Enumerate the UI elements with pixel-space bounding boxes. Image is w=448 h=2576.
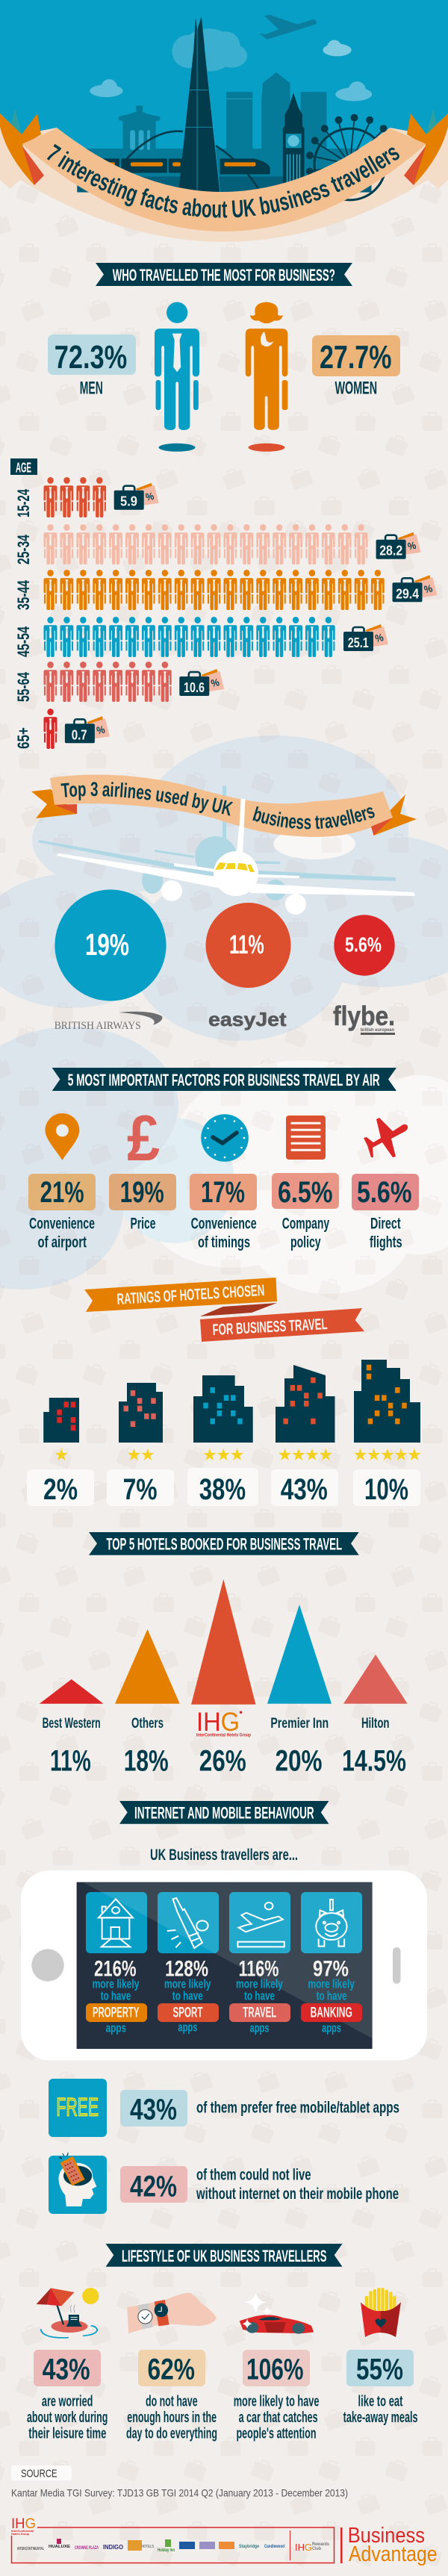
factor: timings bbox=[190, 1114, 257, 1251]
factor: company policy: Company bbox=[282, 1216, 329, 1233]
lifestyle: hours in day: enough hours in the bbox=[127, 2409, 217, 2426]
footer logos: INTERCONTINENTAL bbox=[17, 2547, 44, 2551]
1 star hotel: 2% bbox=[43, 1473, 78, 1506]
factor: company policy: policy bbox=[290, 1234, 321, 1251]
British Airways: 19% bbox=[85, 927, 129, 962]
Others bbox=[115, 1629, 180, 1778]
stat: free apps bbox=[49, 2079, 399, 2137]
app: property bbox=[86, 1957, 147, 2035]
subheading: UK Business travellers are... bbox=[150, 1847, 298, 1864]
heading ribbon: top 3 airlines: business travellers bbox=[252, 806, 375, 829]
footer logos: Holiday Inn bbox=[158, 2548, 175, 2553]
app: property: apps bbox=[106, 2021, 126, 2035]
app: travel: apps bbox=[249, 2021, 269, 2035]
app: banking: apps bbox=[322, 2021, 341, 2035]
illustration: aeroplane bbox=[38, 785, 415, 915]
factor: price: Price bbox=[130, 1216, 155, 1233]
age 25-34: 28.2 bbox=[379, 543, 402, 559]
shadow: man bbox=[158, 444, 196, 452]
icon: head with phone bbox=[58, 2152, 96, 2206]
footer logos: Candlewood bbox=[264, 2545, 284, 2549]
heading: lifestyle bbox=[106, 2244, 342, 2267]
4 star hotel: 43% bbox=[281, 1473, 328, 1506]
age 35-44 bbox=[14, 570, 438, 610]
lifestyle: hours in day: 62% bbox=[148, 2353, 195, 2386]
lifestyle: take-away bbox=[343, 2288, 418, 2426]
skyline bbox=[77, 15, 388, 200]
ribbon tails bbox=[0, 109, 448, 185]
icon: man bbox=[155, 302, 199, 430]
Hilton: Hilton bbox=[361, 1716, 390, 1732]
hotel ratings bbox=[27, 1360, 421, 1506]
age 55-64: % bbox=[210, 676, 221, 689]
IHG bbox=[191, 1579, 255, 1778]
app: property: more likely bbox=[93, 1977, 140, 1991]
factor: airport: 21% bbox=[40, 1176, 84, 1209]
lifestyle: car: people's attention bbox=[236, 2426, 317, 2442]
app: sport: SPORT bbox=[173, 2006, 203, 2021]
factors row bbox=[28, 1103, 419, 1251]
factor: airport: of airport bbox=[37, 1234, 87, 1251]
5 star hotel bbox=[353, 1360, 421, 1506]
lifestyle: hours in day: do not have bbox=[146, 2393, 198, 2409]
app: sport: more likely bbox=[164, 1977, 211, 1991]
source bbox=[11, 2465, 348, 2498]
Others: 18% bbox=[124, 1745, 169, 1778]
source: Kantar Media TGI Survey: TJD13 GB TGI 2014 Q2 (January 2013 - December 2013) bbox=[11, 2486, 348, 2498]
age 25-34 bbox=[14, 524, 421, 564]
IHG: InterContinental Hotels Group bbox=[196, 1734, 251, 1738]
app: sport: apps bbox=[178, 2020, 197, 2035]
flybe: british european bbox=[361, 1028, 394, 1033]
age 45-54: 25.1 bbox=[348, 635, 369, 650]
easyJet bbox=[206, 903, 291, 1030]
lifestyle: worried about work: are worried bbox=[42, 2393, 93, 2409]
app: travel: to have bbox=[244, 1989, 275, 2003]
stat: internet on mobile: 42% bbox=[130, 2170, 177, 2203]
3 star hotel bbox=[187, 1375, 258, 1506]
age 65+: 65+ bbox=[14, 727, 33, 749]
title ribbon bbox=[22, 128, 426, 231]
heading ribbons: ratings of hotels bbox=[84, 1278, 364, 1342]
age 45-54 bbox=[14, 617, 388, 657]
factor: timings: of timings bbox=[198, 1234, 250, 1251]
flybe: flybe. bbox=[333, 1001, 395, 1031]
stat: free apps: 43% bbox=[130, 2093, 177, 2126]
lifestyle: hours in day bbox=[126, 2293, 217, 2442]
lifestyle: take-away: like to eat bbox=[358, 2393, 403, 2409]
age 15-24 bbox=[14, 477, 159, 517]
lifestyle row bbox=[27, 2288, 418, 2442]
icon: woman bbox=[246, 302, 287, 430]
age 15-24: % bbox=[144, 490, 155, 503]
Others: Others bbox=[131, 1716, 164, 1732]
age heading bbox=[10, 458, 37, 475]
factor: airport bbox=[28, 1113, 96, 1251]
app: banking: 97% bbox=[313, 1957, 349, 1982]
age 15-24: 15-24 bbox=[14, 488, 33, 517]
lifestyle: car: more likely to have bbox=[234, 2393, 320, 2409]
5 star hotel: 10% bbox=[364, 1473, 408, 1506]
Best Western: 11% bbox=[50, 1745, 91, 1778]
age heading: AGE bbox=[16, 460, 31, 475]
app: sport: to have bbox=[172, 1989, 203, 2003]
lifestyle: worried about work: about work during bbox=[27, 2409, 108, 2426]
footer logos: InterContinental bbox=[11, 2529, 34, 2533]
Hilton bbox=[342, 1655, 408, 1778]
British Airways bbox=[55, 889, 167, 1032]
app tiles bbox=[86, 1892, 362, 1953]
header illustration bbox=[0, 0, 448, 242]
factor: timings: 17% bbox=[201, 1176, 245, 1209]
1 star hotel bbox=[27, 1398, 94, 1506]
Business Advantage logo bbox=[340, 2524, 438, 2566]
age 65+: % bbox=[96, 723, 106, 736]
factor: company policy: 6.5% bbox=[278, 1176, 333, 1209]
footer logos: IHG bbox=[295, 2542, 312, 2553]
IHG: IHG bbox=[196, 1708, 240, 1737]
app: property: 216% bbox=[94, 1957, 137, 1982]
top hotels chart bbox=[40, 1579, 408, 1778]
Premier Inn: Premier Inn bbox=[270, 1716, 329, 1732]
lifestyle: car bbox=[234, 2292, 320, 2442]
factor: direct flights: Direct bbox=[370, 1216, 401, 1233]
women stat bbox=[312, 335, 400, 398]
app icons bbox=[99, 1898, 347, 1948]
factor: price: 19% bbox=[120, 1176, 164, 1209]
heading: 5 factors bbox=[52, 1068, 396, 1091]
heading ribbons: ratings of hotels: FOR BUSINESS TRAVEL bbox=[212, 1316, 328, 1339]
app: banking: BANKING bbox=[311, 2006, 352, 2021]
airlines bubbles bbox=[55, 889, 395, 1035]
men stat: 72.3% bbox=[55, 339, 127, 376]
footer logos: INDIGO bbox=[103, 2544, 123, 2551]
heading: internet and mobile: INTERNET AND MOBILE BEHAVIOUR bbox=[134, 1803, 314, 1822]
men stat bbox=[48, 335, 136, 398]
footer logos: Staybridge bbox=[239, 2545, 260, 2549]
lifestyle: worried about work: their leisure time bbox=[28, 2426, 106, 2442]
app: travel: TRAVEL bbox=[243, 2006, 277, 2021]
heading: internet and mobile bbox=[119, 1801, 329, 1824]
heading ribbon: top 3 airlines bbox=[31, 775, 417, 837]
IHG: 26% bbox=[199, 1745, 246, 1778]
heading ribbons: ratings of hotels: RATINGS OF HOTELS CHOSEN bbox=[116, 1282, 265, 1308]
footer logos: HUALUXE bbox=[49, 2545, 71, 2549]
age 45-54: 45-54 bbox=[14, 626, 33, 657]
app: travel bbox=[229, 1957, 290, 2035]
factor: direct flights: 5.6% bbox=[357, 1176, 412, 1209]
factor: company policy bbox=[272, 1116, 339, 1251]
age 15-24: 5.9 bbox=[120, 494, 137, 509]
app: travel: 116% bbox=[239, 1957, 279, 1982]
age 25-34: 25-34 bbox=[14, 534, 33, 564]
lifestyle: worried about work bbox=[27, 2288, 108, 2442]
age 55-64: 10.6 bbox=[184, 679, 205, 695]
title: 7 interesting facts about UK business travellers bbox=[46, 143, 399, 218]
lifestyle: take-away: 55% bbox=[356, 2353, 403, 2386]
lifestyle: car: a car that catches bbox=[239, 2409, 318, 2426]
factor: price bbox=[109, 1103, 176, 1233]
stat: internet on mobile: of them could not live bbox=[196, 2166, 311, 2183]
heading: top 5 hotels bbox=[89, 1532, 359, 1555]
lifestyle: hours in day: day to do everything bbox=[126, 2426, 217, 2442]
easyJet: 11% bbox=[229, 930, 264, 959]
flybe: 5.6% bbox=[345, 933, 382, 956]
factor: airport: Convenience bbox=[29, 1216, 95, 1233]
app: banking bbox=[301, 1957, 362, 2035]
factor: direct flights: flights bbox=[370, 1234, 402, 1251]
British Airways: BRITISH AIRWAYS bbox=[55, 1020, 141, 1032]
lifestyle: car: 106% bbox=[246, 2353, 303, 2386]
age 35-44: % bbox=[423, 582, 434, 595]
flybe bbox=[333, 915, 395, 1035]
phone panel bbox=[21, 1870, 427, 2060]
stat: free apps: FREE bbox=[56, 2093, 99, 2121]
4 star hotel bbox=[271, 1365, 338, 1506]
Premier Inn bbox=[267, 1605, 332, 1778]
women stat: 27.7% bbox=[320, 339, 391, 376]
2 star hotel: 7% bbox=[123, 1473, 158, 1506]
men stat: MEN bbox=[80, 378, 103, 398]
age 65+ bbox=[14, 709, 110, 749]
stat: internet on mobile bbox=[49, 2152, 399, 2214]
Hilton: 14.5% bbox=[342, 1745, 406, 1778]
easyJet: easyJet bbox=[208, 1008, 287, 1030]
age chart bbox=[10, 458, 438, 749]
age 55-64: 55-64 bbox=[14, 671, 33, 702]
heading ribbon: top 3 airlines: Top 3 airlines used by UK bbox=[60, 782, 233, 816]
app: sport bbox=[158, 1957, 219, 2035]
age 35-44: 35-44 bbox=[14, 579, 33, 610]
factor: timings: Convenience bbox=[191, 1216, 257, 1233]
app: travel: more likely bbox=[236, 1977, 283, 1991]
app: property: to have bbox=[101, 1989, 131, 2003]
age 25-34: % bbox=[406, 539, 417, 553]
footer logos: CROWNE PLAZA bbox=[75, 2546, 99, 2551]
factor: price: £ bbox=[127, 1103, 160, 1175]
app: property: PROPERTY bbox=[93, 2006, 140, 2021]
age 65+: 0.7 bbox=[72, 727, 87, 742]
3 star hotel: 38% bbox=[199, 1473, 246, 1506]
footer logos: Club bbox=[312, 2547, 321, 2551]
app: banking: to have bbox=[317, 1989, 347, 2003]
clouds behind airlines and factors bbox=[0, 735, 448, 1294]
footer logos: Hotels Group bbox=[11, 2532, 30, 2536]
Best Western: Best Western bbox=[43, 1716, 101, 1732]
app: sport: 128% bbox=[165, 1957, 208, 1982]
age 55-64 bbox=[14, 662, 224, 702]
age 45-54: % bbox=[374, 631, 385, 644]
footer logos: IHG bbox=[11, 2516, 36, 2532]
gender split bbox=[48, 302, 400, 452]
footer logos: HOTELS bbox=[141, 2545, 155, 2549]
footer logos: Rewards bbox=[312, 2542, 330, 2547]
lifestyle: worried about work: 43% bbox=[43, 2353, 90, 2386]
women stat: WOMEN bbox=[335, 378, 377, 398]
footer logos bbox=[10, 2516, 335, 2563]
shadow: woman bbox=[248, 444, 285, 452]
age 35-44: 29.4 bbox=[396, 585, 420, 601]
app: banking: more likely bbox=[308, 1977, 355, 1991]
2 star hotel bbox=[107, 1383, 174, 1506]
source: SOURCE bbox=[21, 2467, 57, 2480]
Premier Inn: 20% bbox=[275, 1745, 323, 1778]
heading: who travelled bbox=[96, 263, 352, 286]
Business Advantage logo: Business bbox=[348, 2524, 425, 2548]
Best Western bbox=[40, 1679, 103, 1778]
factor: direct flights bbox=[352, 1118, 419, 1251]
